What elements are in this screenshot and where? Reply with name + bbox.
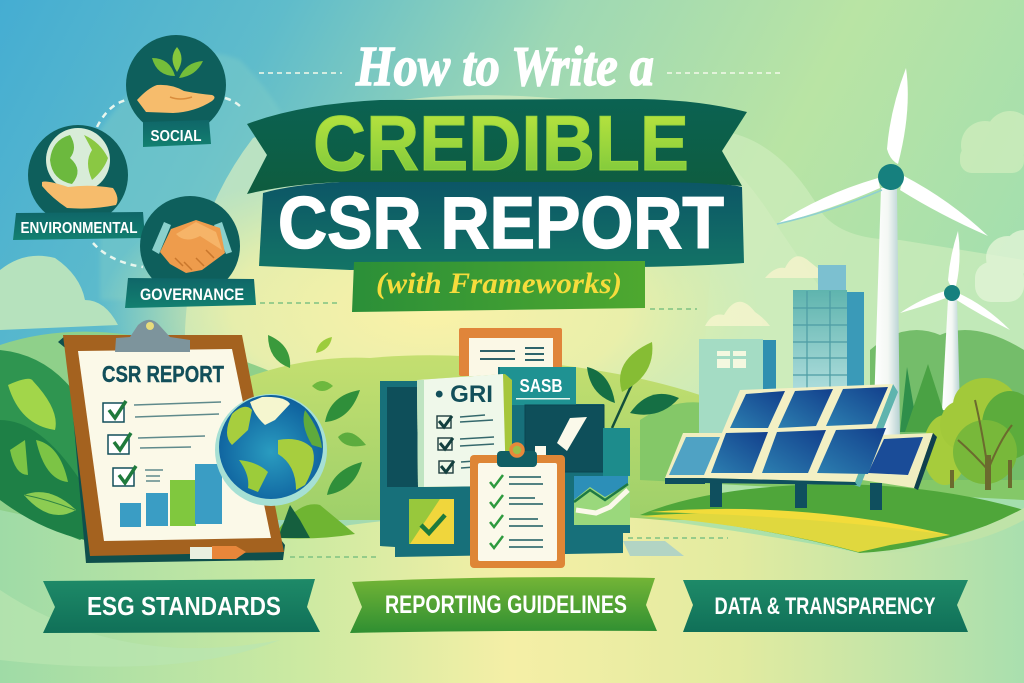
label: social: SOCIAL xyxy=(150,128,202,145)
main panel xyxy=(703,384,898,487)
bar chart xyxy=(120,464,222,527)
solar panels xyxy=(665,384,937,510)
yellow check card xyxy=(409,499,454,544)
gri document: • GRI xyxy=(435,381,493,408)
banner: data and transparency: DATA & TRANSPARENCY xyxy=(714,593,936,620)
banner: reporting guidelines: REPORTING GUIDELINES xyxy=(385,591,627,619)
legs xyxy=(710,483,882,510)
clip xyxy=(115,320,190,352)
dashed connectors xyxy=(259,73,783,557)
cycle dashes xyxy=(93,98,241,267)
icon: governance xyxy=(125,196,256,308)
frameworks documents group xyxy=(380,328,679,568)
clipboard: csr report xyxy=(58,320,285,563)
icon: environmental xyxy=(13,125,145,240)
subtitle ribbon: with frameworks xyxy=(352,261,645,312)
screen xyxy=(525,405,604,472)
low building xyxy=(699,339,776,439)
clipboard: csr report: CSR REPORT xyxy=(102,361,224,387)
guidelines clipboard xyxy=(470,444,565,568)
small clouds xyxy=(705,256,830,326)
banner: esg standards xyxy=(43,579,320,633)
right clipboard foliage xyxy=(268,335,366,538)
plant xyxy=(587,342,679,428)
title: how to write a: How to Write a xyxy=(355,36,654,98)
banner: reporting guidelines xyxy=(350,577,657,633)
trees right xyxy=(900,364,1024,490)
folder xyxy=(380,367,630,557)
globe xyxy=(215,394,327,506)
sasb tab: SASB xyxy=(520,376,562,396)
subtitle ribbon: with frameworks: (with Frameworks) xyxy=(376,267,622,300)
banner: data and transparency xyxy=(683,580,968,632)
title ribbon: csr report panel: CSR REPORT xyxy=(278,183,724,264)
map chart xyxy=(574,476,630,525)
title ribbon: credible: CREDIBLE xyxy=(313,99,689,187)
left foliage xyxy=(0,350,95,540)
icon: social xyxy=(126,35,226,147)
tower building xyxy=(793,265,864,400)
wind turbine large xyxy=(777,68,988,440)
gri document xyxy=(417,374,512,487)
checkboxes xyxy=(103,401,136,486)
sasb tab xyxy=(500,367,576,405)
banner: esg standards: ESG STANDARDS xyxy=(87,591,281,621)
right panel xyxy=(862,433,937,490)
pen xyxy=(190,546,246,559)
left panel xyxy=(665,433,722,484)
wind turbine small xyxy=(900,231,1010,410)
buildings xyxy=(699,265,864,439)
ground and hills xyxy=(0,330,1024,683)
top document xyxy=(459,328,562,376)
label: environmental: ENVIRONMENTAL xyxy=(20,220,138,237)
label: governance: GOVERNANCE xyxy=(140,285,244,304)
